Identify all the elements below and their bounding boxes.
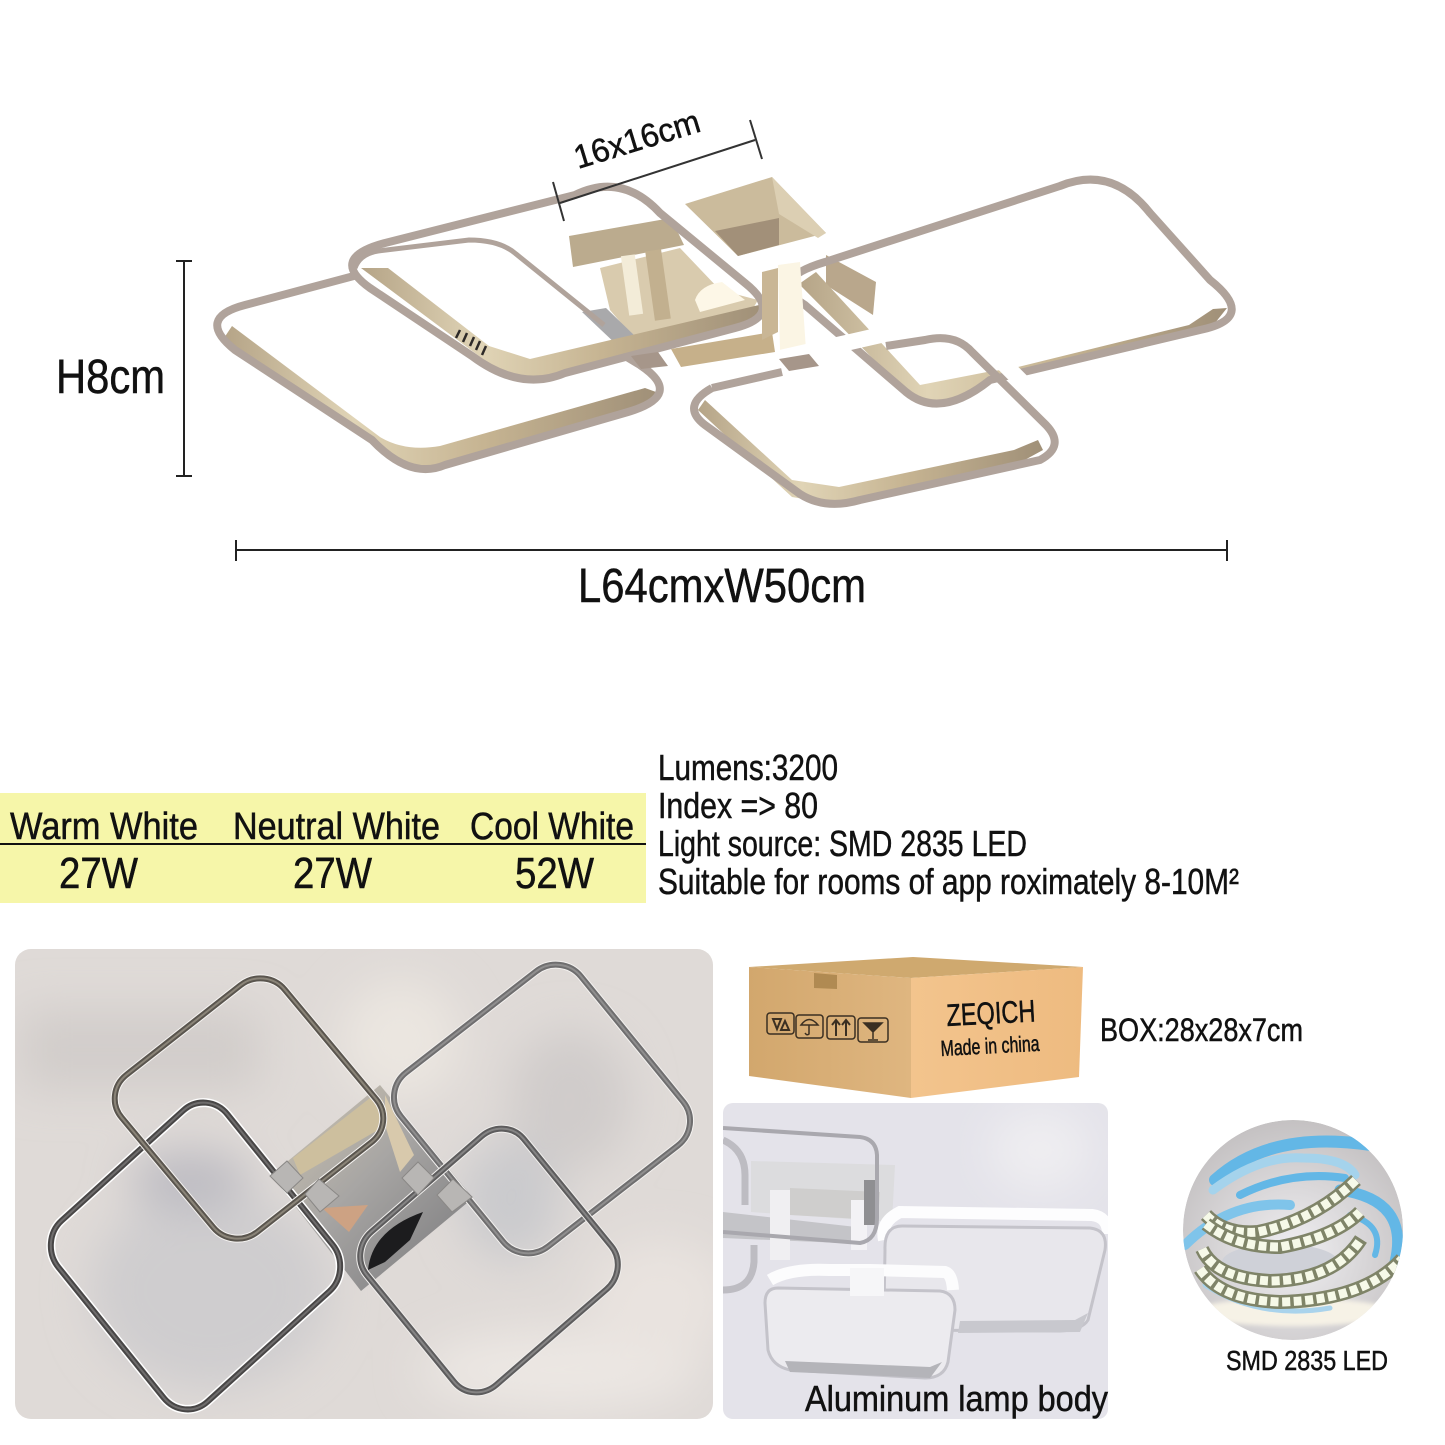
connectors: [631, 352, 819, 371]
soft glow: [1211, 1299, 1375, 1328]
dimension: length and width: L64cmxW50cm: [578, 560, 866, 613]
ring: right: [883, 1212, 1108, 1333]
center box inside ring: [569, 218, 775, 367]
ring: back left: [723, 1128, 877, 1290]
specification list: Suitable for rooms of app roximately 8-10M²: [658, 861, 1239, 902]
coil: top: [1206, 1180, 1356, 1232]
left large ring: [217, 255, 660, 469]
inner ring edge: [355, 240, 604, 325]
neutral white: [233, 806, 440, 898]
photo: aluminum lamp body: [723, 1103, 1108, 1419]
box size label: BOX:28x28x7cm: [1100, 1012, 1303, 1048]
ring: top left: [110, 974, 388, 1243]
mounting box, right part: [826, 255, 876, 315]
shipping box: Made in china: [940, 1031, 1041, 1061]
shipping box: [749, 957, 1083, 1098]
caption: Aluminum lamp body: [805, 1378, 1108, 1419]
wattage table: [0, 793, 646, 903]
dimension: height: [56, 261, 192, 476]
photo: lamp from below: [15, 949, 730, 1423]
light center: [1222, 1247, 1335, 1274]
neutral white: 27W: [293, 849, 372, 898]
connector brackets: [270, 1161, 472, 1212]
specification list: [658, 747, 1239, 902]
neutral white: Neutral White: [233, 806, 440, 848]
small top ring: [352, 187, 775, 380]
warm white: Warm White: [10, 806, 198, 848]
right large ring: [789, 180, 1232, 404]
handling icons: [767, 1013, 888, 1042]
ring: top right: [390, 960, 694, 1258]
mounting plate: [723, 1161, 895, 1260]
top mounting plate: [685, 177, 826, 256]
coil: bottom: [1200, 1259, 1402, 1302]
cool white: Cool White: [470, 806, 634, 848]
brand text: ZEQICH: [946, 993, 1036, 1033]
ring: lower right: [356, 1124, 622, 1396]
specification list: Light source: SMD 2835 LED: [658, 823, 1027, 864]
LED strip photo: [1183, 1120, 1403, 1340]
central chrome plate: [271, 1085, 473, 1291]
dimension: diameter 16x16cm: 16x16cm: [569, 102, 704, 176]
product drawing: ceiling lamp: [217, 177, 1232, 505]
cool white: 52W: [515, 849, 594, 898]
LED caption: SMD 2835 LED: [1226, 1345, 1388, 1376]
warm white: [10, 806, 198, 898]
coil: second: [1206, 1212, 1360, 1247]
dimension: length and width: [236, 540, 1227, 613]
LED coils: [1200, 1180, 1402, 1302]
dimension: height: H8cm: [56, 351, 165, 404]
center light column: [762, 262, 806, 350]
ring: front: [765, 1268, 955, 1378]
soft ceiling shadows: [20, 980, 730, 1410]
coil: third: [1202, 1239, 1361, 1281]
vent slots: [456, 330, 486, 355]
specification list: Index => 80: [658, 785, 818, 826]
dimension: diameter 16x16cm: [553, 102, 762, 221]
specification list: Lumens:3200: [658, 747, 838, 788]
cool white: [470, 806, 634, 898]
ring: lower left: [46, 1098, 345, 1414]
blue backing bands: [1185, 1142, 1398, 1311]
warm white: 27W: [59, 849, 138, 898]
lower small ring: [694, 324, 1060, 505]
